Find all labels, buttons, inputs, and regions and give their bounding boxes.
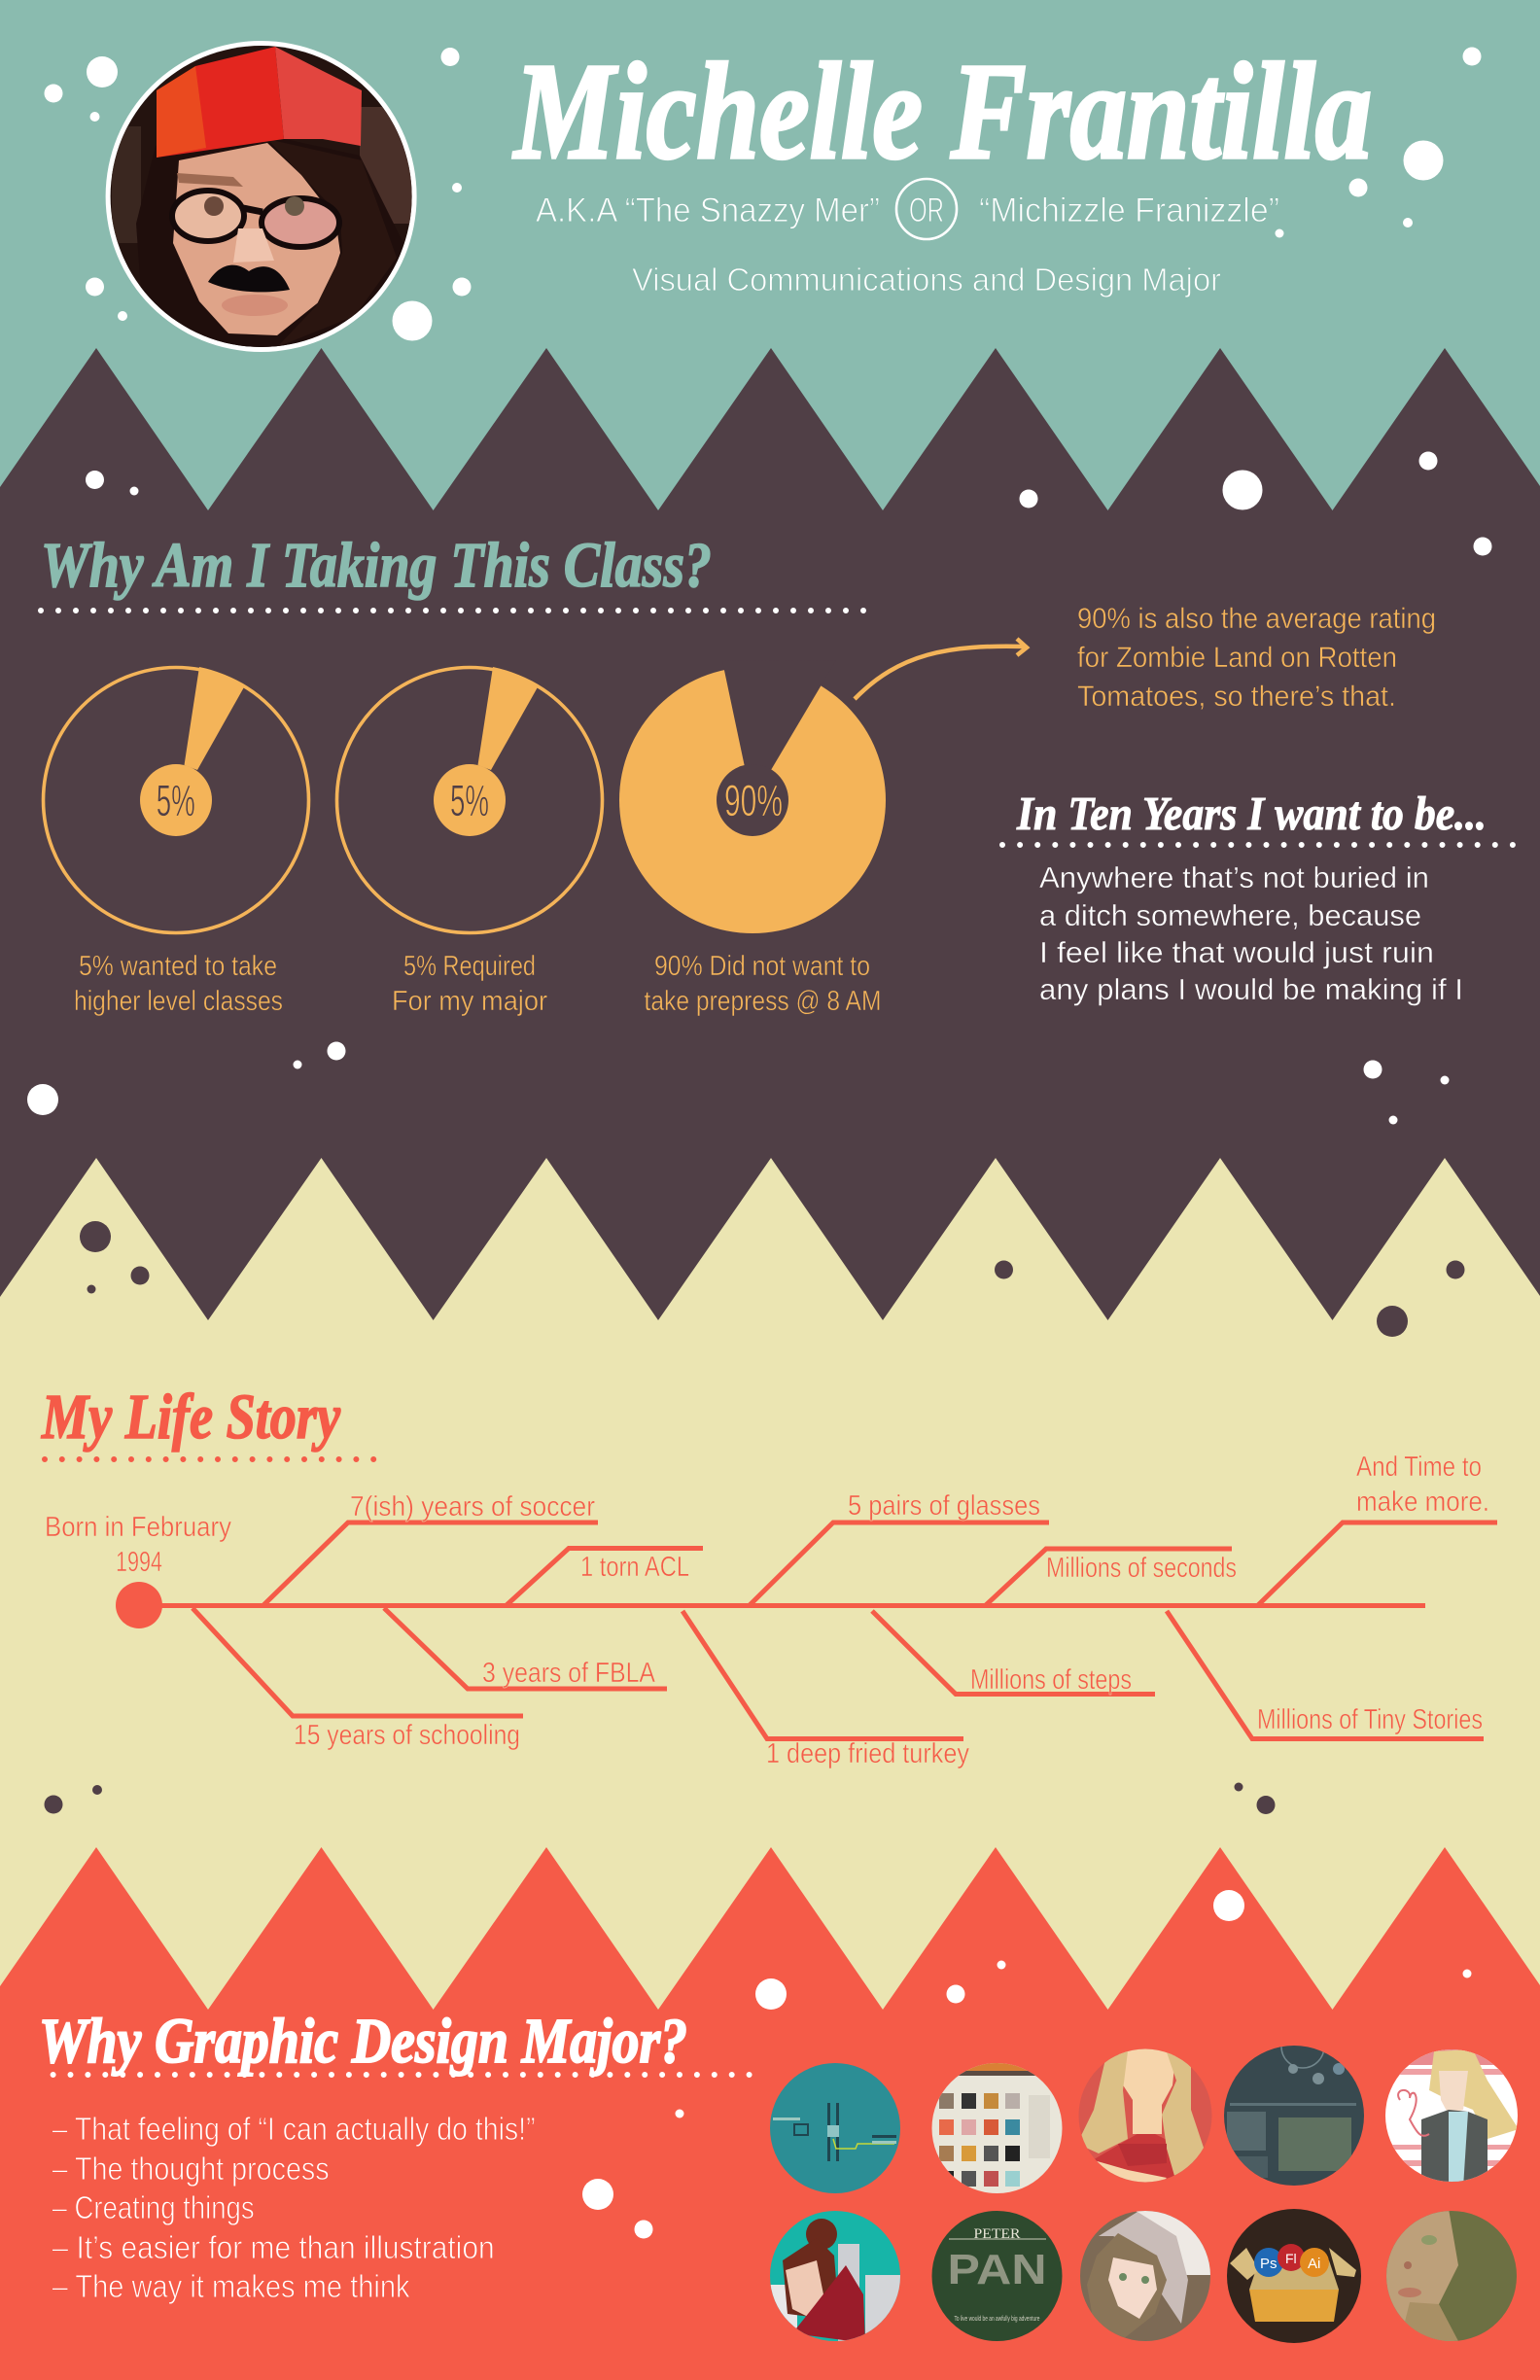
portfolio thumbnail 10: medusa portrait [1384,2209,1521,2345]
pie label 3 [644,951,881,1017]
timeline chart: And Time to [1356,1452,1482,1483]
portfolio thumbnail 7: Peter Pan poster: PAN [947,2246,1046,2293]
portfolio thumbnail 7: Peter Pan poster: PETER [974,2226,1021,2242]
title: Michelle Frantilla [512,34,1372,188]
timeline chart: make more. [1356,1487,1489,1518]
pie label 3: 90% Did not want to [654,951,870,982]
zombie land note: Tomatoes, so there’s that. [1077,681,1396,713]
zombie land note: for Zombie Land on Rotten [1077,642,1397,674]
pie label 2 [392,951,547,1017]
portfolio thumbnail 7: Peter Pan poster: To live would be an awfully big adventure [955,2316,1040,2323]
text block: reasons list: – That feeling of “I can actually do this!” [52,2111,536,2147]
text block: in ten years answer: any plans I would be making if I [1039,972,1463,1006]
timeline chart: 7(ish) years of soccer [350,1491,595,1522]
panel: my life story background [0,1158,1540,2380]
pie chart: 5% wanted to take higher level classes [43,667,309,933]
text block: in ten years answer: I feel like that would just ruin [1039,935,1434,969]
dark confetti dots: cream section [45,1221,1464,1814]
timeline chart: 15 years of schooling [294,1720,520,1751]
text block: reasons list: – The way it makes me think [52,2268,410,2304]
subtitle: aka 2: “Michizzle Franizzle” [979,192,1279,229]
portfolio thumbnail 9: software box with Ps Fl Ai: Ai [1308,2256,1320,2272]
timeline chart: 5 pairs of glasses [848,1490,1040,1522]
subtitle: aka 1: A.K.A “The Snazzy Mer” [536,192,880,229]
white confetti dots: header and dark section [27,47,1491,1124]
OR badge [896,179,957,239]
pie label 1: higher level classes [74,986,283,1017]
pie chart: 90% did not want to: 90% [724,776,783,825]
text block: in ten years answer: Anywhere that’s not buried in [1039,860,1429,894]
heading: why am I taking this class: Why Am I Taking This Class? [41,530,712,601]
arrow to zombie land note [855,639,1027,699]
portfolio thumbnail 9: software box with Ps Fl Ai [1225,2207,1363,2345]
major line: Visual Communications and Design Major [632,262,1221,298]
portfolio thumbnail 1: teal infographic [768,2061,904,2197]
portfolio thumbnail 2: online shop grid [928,2061,1065,2197]
pie label 2: 5% Required [403,951,536,982]
portfolio thumbnail 5: anime girl with heart [1384,2048,1521,2188]
panel: why graphic design major background [0,1847,1540,2380]
OR badge: OR [909,192,944,229]
timeline chart [45,1452,1497,1769]
pie label 1: 5% wanted to take [79,951,277,982]
text block: in ten years answer: a ditch somewhere, because [1039,898,1421,932]
timeline chart: 1 torn ACL [580,1552,689,1583]
heading: my life story: My Life Story [41,1382,341,1452]
timeline chart: 1 deep fried turkey [766,1738,969,1769]
text block: reasons list: – Creating things [52,2189,255,2225]
portfolio thumbnail 9: software box with Ps Fl Ai: Ps [1260,2256,1278,2272]
timeline chart: 1994 [116,1547,162,1578]
heading: why graphic design major: Why Graphic Design Major? [39,2006,687,2077]
portrait photo: face with red paper hat and fake moustache [106,39,418,360]
pie chart: 90% did not want to [619,660,886,933]
timeline chart: Millions of seconds [1046,1553,1237,1584]
portfolio thumbnail 6: girl in red hoodie [768,2209,904,2345]
pie label 3: take prepress @ 8 AM [644,986,881,1017]
timeline chart: 3 years of FBLA [482,1658,656,1689]
portfolio thumbnail 4: moon phases chart [1224,2046,1364,2186]
portfolio thumbnail 8: manga girl in hood [1079,2209,1215,2345]
portfolio thumbnail 9: software box with Ps Fl Ai: Fl [1285,2251,1297,2266]
heading: in ten years: In Ten Years I want to be... [1016,787,1487,840]
timeline chart: Born in February [45,1512,231,1543]
pie chart: 5% required [336,667,603,933]
pie chart: 5% required: 5% [450,776,489,825]
pie chart: 5% wanted to take higher level classes: 5% [157,776,195,825]
portfolio thumbnail 7: Peter Pan poster [928,2209,1065,2345]
pie label 1 [74,951,283,1017]
pie label 2: For my major [392,986,547,1017]
text block: reasons list: – The thought process [52,2151,330,2187]
zombie land note [1077,603,1436,713]
text block: reasons list [52,2111,536,2304]
zombie land note: 90% is also the average rating [1077,603,1436,635]
timeline chart: Millions of Tiny Stories [1257,1704,1483,1735]
white confetti dots: coral section [582,1890,1472,2238]
timeline chart: Millions of steps [970,1664,1132,1696]
text block: reasons list: – It’s easier for me than illustration [52,2229,495,2265]
portfolio thumbnail 3: blonde illustration [1079,2049,1211,2182]
text block: in ten years answer [1039,860,1463,1006]
